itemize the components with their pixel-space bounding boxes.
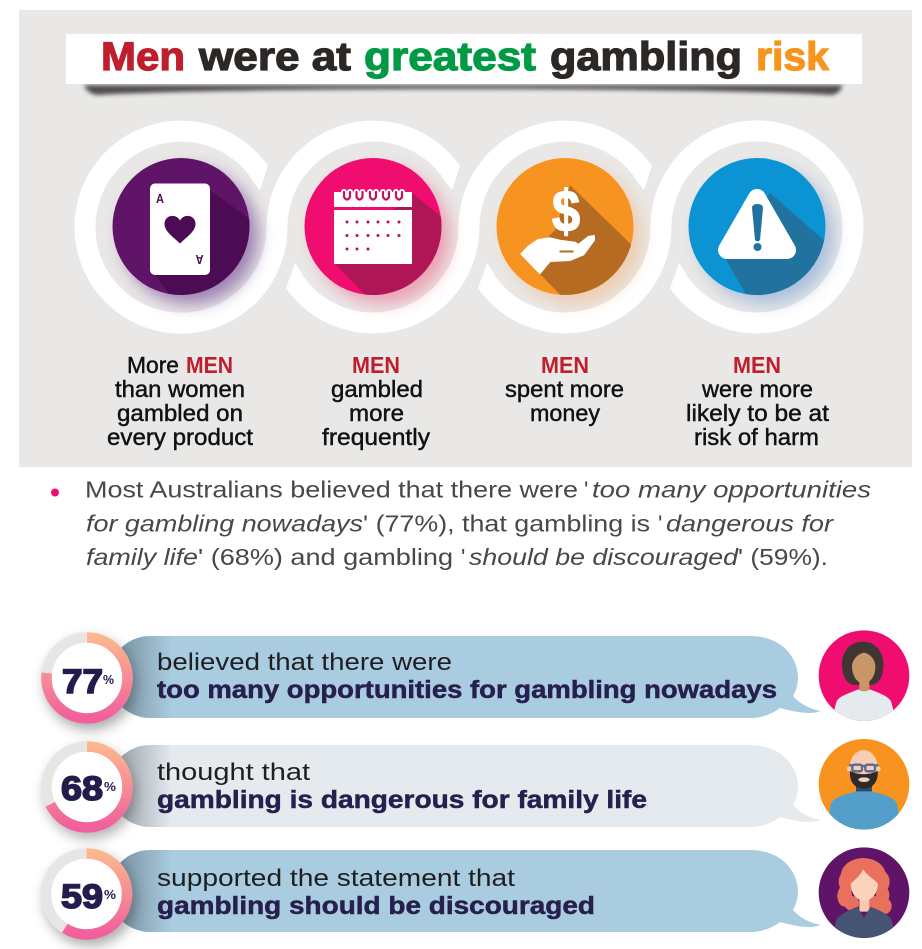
icon: money in hand: $ [552,179,580,244]
icon: money in hand [496,158,645,310]
label: men at risk of harm: risk of harm [694,424,819,450]
speech bubble: 77%: believed that there were [157,649,452,676]
donut chart: 77%: % [103,672,114,687]
white connected rings [85,131,853,323]
title banner: risk [756,35,830,79]
label: men gambled more frequently: more [349,400,404,426]
donut chart: 59% [44,854,136,946]
speech bubble: 59%: supported the statement that [157,865,515,892]
donut chart: 77% [44,638,136,730]
title banner: Men [101,35,185,79]
label: men gambled more frequently: frequently [322,424,431,450]
label: more men than women: gambled on [117,400,243,426]
bullet paragraph: too many opportunities [592,476,872,502]
label: more men than women: than women [115,376,245,402]
speech bubble: 59% [109,850,821,932]
bullet paragraph: ' (68%) and gambling [198,544,453,570]
label: more men than women [107,352,254,450]
label: men spent more money: money [530,400,600,426]
donut chart: 68% [44,746,136,839]
icon: calendar [304,158,455,310]
avatar: woman with dark hair [819,630,909,727]
bullet paragraph: ' [658,510,662,536]
speech bubble: 68% [109,745,821,827]
bullet paragraph: for gambling nowadays [86,510,364,536]
label: more men than women: More [127,352,179,378]
donut chart: 77%: 77 [62,663,103,701]
bullet paragraph: family life [86,544,198,570]
speech bubble: 77% [109,636,821,718]
label: men gambled more frequently: gambled [331,376,423,402]
bullet paragraph: should be discouraged [469,544,739,570]
speech bubble: 68%: gambling is dangerous for family life [157,786,647,814]
speech bubble: 77%: too many opportunities for gambling nowadays [157,676,777,704]
title banner [66,34,862,95]
donut chart: 68%: % [104,779,116,794]
speech bubble: 68%: thought that [157,759,310,786]
icon: warning triangle [688,158,835,310]
title banner: were at [198,35,351,79]
bullet paragraph: ' [584,476,588,502]
avatar: bald man with beard [819,739,909,833]
label: men at risk of harm: were more [701,376,813,402]
bullet paragraph: dangerous for [666,510,835,536]
title banner: greatest [364,35,536,79]
bullet paragraph: Most Australians believed that there were [85,476,578,502]
label: more men than women: every product [107,424,254,450]
icon: playing card: A [195,252,204,267]
bullet paragraph: ' [461,544,465,570]
label: men spent more money: spent more [505,376,624,402]
title banner: gambling [550,35,742,79]
bullet paragraph: ' (77%), that gambling is [363,510,650,536]
label: men gambled more frequently [322,352,431,450]
label: men at risk of harm: MEN [733,352,781,378]
label: men spent more money: MEN [541,352,589,378]
donut chart: 59%: % [104,887,116,902]
icon: playing card [112,158,262,310]
panel: men at greatest risk [19,10,912,467]
bullet paragraph [51,476,872,570]
label: men spent more money [505,352,624,426]
speech bubble: 59%: gambling should be discouraged [157,892,595,920]
bullet paragraph: ' (59%). [738,544,828,570]
label: men at risk of harm: likely to be at [686,400,830,426]
label: more men than women: MEN [186,352,233,378]
label: men at risk of harm [686,352,830,450]
donut chart: 59%: 59 [61,878,103,916]
icon: playing card: A [156,191,165,206]
donut chart: 68%: 68 [61,770,103,808]
avatar: woman with red hair [819,847,909,940]
label: men gambled more frequently: MEN [352,352,400,378]
